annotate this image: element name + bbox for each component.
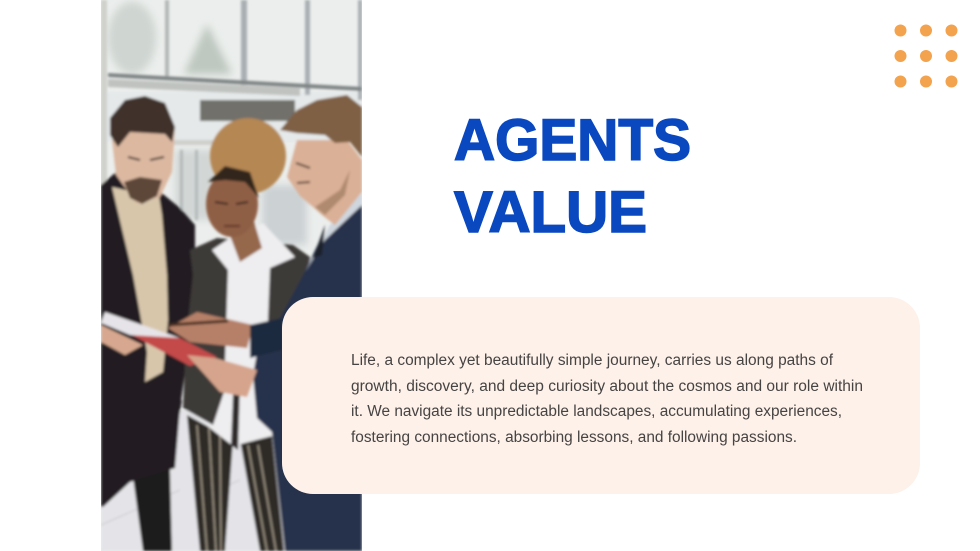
title: AGENTS xyxy=(454,108,691,173)
photo: three colleagues reviewing a document xyxy=(101,0,362,551)
left hand xyxy=(101,325,143,355)
window frames xyxy=(101,0,362,220)
body text: it. We navigate its unpredictable landscapes, accumulating experiences, xyxy=(351,403,842,420)
man left: turtleneck xyxy=(112,187,168,382)
front hand xyxy=(187,355,257,397)
title xyxy=(454,108,691,245)
panel: description card xyxy=(282,297,920,494)
body text xyxy=(351,352,863,446)
man left: jacket xyxy=(101,173,195,507)
woman: white shirt xyxy=(197,223,295,446)
woman: hair and face xyxy=(210,118,286,194)
man right: face and hair xyxy=(287,140,362,225)
floor xyxy=(101,410,291,551)
woman: blazer xyxy=(183,238,310,432)
woman: striped trousers xyxy=(187,415,284,551)
body text: Life, a complex yet beautifully simple journey, carries us along paths of xyxy=(351,352,834,369)
icon: orange dot grid xyxy=(894,24,958,88)
window background trees xyxy=(108,2,307,245)
title: VALUE xyxy=(454,180,647,245)
man right: suit xyxy=(253,202,362,551)
body text: fostering connections, absorbing lessons, and following passions. xyxy=(351,429,797,446)
body text: growth, discovery, and deep curiosity about the cosmos and our role within xyxy=(351,378,863,395)
man left: face and hair xyxy=(112,125,175,203)
man right: collar and shirt xyxy=(305,193,362,272)
hand with pen xyxy=(168,312,253,348)
man left: trousers xyxy=(128,400,182,551)
document and red folder xyxy=(128,333,217,366)
